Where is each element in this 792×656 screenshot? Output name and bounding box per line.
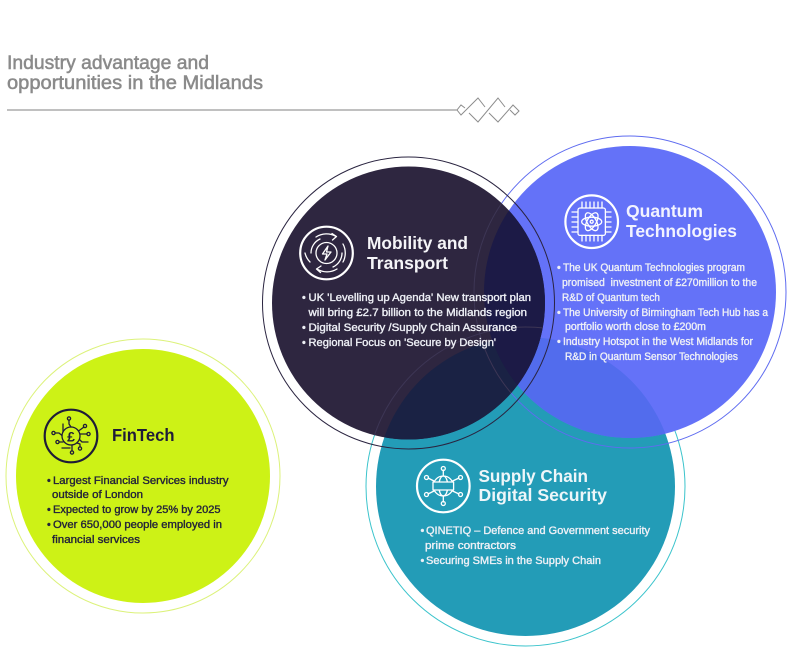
- text block: fintech bullets: Largest Financial Services industry: [53, 475, 229, 487]
- text block: supply chain bullets: [420, 525, 651, 567]
- icon: pound sterling network: £: [67, 428, 75, 444]
- text block: mobility bullets: Digital Security /Supply Chain Assurance: [308, 322, 517, 334]
- title: [7, 53, 263, 94]
- text block: fintech bullets: Over 650,000 people employed in: [53, 519, 222, 531]
- text block: quantum bullets: Industry Hotspot in the West Midlands for: [563, 336, 753, 348]
- text block: mobility bullets: UK 'Levelling up Agenda' New transport plan: [308, 292, 531, 304]
- text block: mobility bullets: [302, 292, 531, 349]
- text block: quantum bullets: The University of Birmingham Tech Hub has a: [563, 307, 768, 319]
- text block: quantum bullets: •: [557, 262, 561, 274]
- heading: Supply Chain Digital Security: [478, 466, 607, 505]
- heading: Quantum Technologies: [626, 201, 737, 241]
- panel: Supply Chain Digital Security: [366, 327, 685, 646]
- text block: fintech bullets: financial services: [52, 534, 141, 546]
- text block: quantum bullets: •: [557, 336, 561, 348]
- heading: Mobility and Transport: [367, 233, 468, 273]
- text block: supply chain bullets: QINETIQ – Defence and Government security: [426, 525, 651, 537]
- title: Industry advantage and: [7, 53, 209, 74]
- text block: quantum bullets: promised investment of £270million to the: [562, 277, 757, 289]
- icon: quantum chip: [565, 195, 618, 248]
- text block: quantum bullets: R&D of Quantum tech: [562, 292, 660, 304]
- text block: quantum bullets: R&D in Quantum Sensor Technologies: [565, 351, 739, 363]
- icon: pound sterling network: [45, 410, 97, 462]
- text block: fintech bullets: •: [47, 475, 51, 487]
- icon: circular arrows with lightning bolt: [300, 227, 353, 279]
- heading: FinTech: FinTech: [112, 425, 174, 445]
- text block: fintech bullets: Expected to grow by 25% by 2025: [53, 504, 220, 516]
- text block: mobility bullets: •: [302, 322, 306, 334]
- text block: quantum bullets: •: [557, 307, 561, 319]
- text block: supply chain bullets: •: [420, 525, 424, 537]
- text block: quantum bullets: [557, 262, 768, 363]
- text block: supply chain bullets: •: [420, 555, 424, 567]
- text block: mobility bullets: will bring £2.7 billion to the Midlands region: [307, 307, 527, 319]
- heading: Quantum Technologies: Quantum: [626, 201, 703, 221]
- title divider with diamond motif: [7, 98, 519, 122]
- heading: Supply Chain Digital Security: Digital Security: [478, 485, 607, 505]
- text block: supply chain bullets: prime contractors: [425, 540, 517, 552]
- icon: networked globe: [417, 460, 470, 512]
- text block: mobility bullets: •: [302, 292, 306, 304]
- panel: Mobility and Transport: [262, 156, 555, 450]
- panel: FinTech: [6, 339, 280, 613]
- text block: supply chain bullets: Securing SMEs in the Supply Chain: [426, 555, 601, 567]
- text block: mobility bullets: Regional Focus on 'Secure by Design': [308, 337, 496, 349]
- text block: fintech bullets: •: [47, 504, 51, 516]
- text block: fintech bullets: •: [47, 519, 51, 531]
- heading: Quantum Technologies: Technologies: [626, 221, 737, 241]
- text block: mobility bullets: •: [302, 337, 306, 349]
- text block: quantum bullets: portfolio worth close to £200m: [565, 321, 706, 333]
- text block: fintech bullets: outside of London: [52, 489, 143, 501]
- heading: Mobility and Transport: Mobility and: [367, 233, 468, 253]
- heading: Supply Chain Digital Security: Supply Chain: [478, 466, 588, 486]
- heading: Mobility and Transport: Transport: [367, 253, 448, 273]
- panel: Quantum Technologies: [501, 136, 786, 448]
- text block: quantum bullets: The UK Quantum Technologies program: [563, 262, 745, 274]
- title: opportunities in the Midlands: [7, 73, 263, 94]
- text block: fintech bullets: [47, 475, 229, 546]
